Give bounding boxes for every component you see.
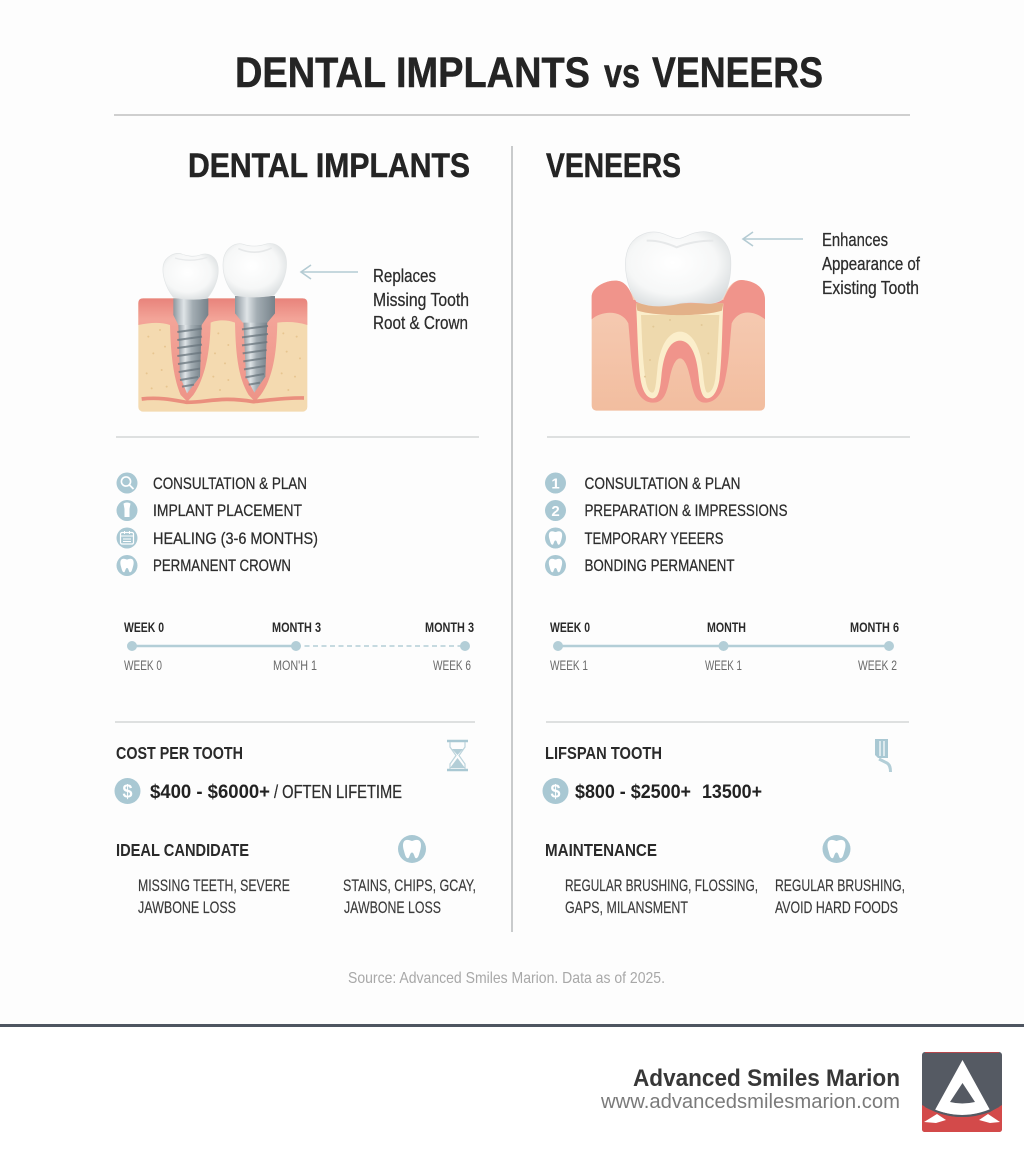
- timeline: MONTH 3: [425, 620, 474, 635]
- icon: dollar: $: [122, 782, 133, 802]
- icon: tooth: [822, 835, 850, 863]
- source note: Source: Advanced Smiles Marion. Data as of 2025.: [348, 970, 665, 987]
- callout: replaces missing tooth root and crown: [373, 266, 469, 333]
- footer: [0, 1024, 1024, 1154]
- timeline: WEEK 0: [550, 620, 590, 635]
- lifespan block: [542, 739, 890, 804]
- timeline: WEEK 1: [705, 658, 742, 673]
- icon: tooth: [116, 555, 138, 576]
- timeline: WEEK 0: [124, 658, 162, 673]
- logo: [922, 1052, 1002, 1132]
- maintenance text: veneers: AVOID HARD FOODS: [775, 899, 898, 917]
- heading: veneers: VENEERS: [546, 147, 681, 185]
- step text: CONSULTATION & PLAN: [584, 475, 740, 493]
- heading: COST PER TOOTH: [116, 743, 243, 763]
- icon: tooth: [398, 835, 426, 863]
- heading: LIFSPAN TOOTH: [545, 743, 662, 763]
- icon: number 2: [545, 500, 566, 521]
- callout: replaces missing tooth root and crown: Root & Crown: [373, 313, 468, 333]
- candidate text: veneers: STAINS, CHIPS, GCAY,: [343, 877, 476, 895]
- candidate text: implants: JAWBONE LOSS: [138, 899, 236, 917]
- callout: enhances appearance: Existing Tooth: [822, 278, 919, 298]
- step text: TEMPORARY YEEERS: [584, 530, 724, 548]
- maintenance text: implants: [565, 877, 758, 917]
- title: vs: [604, 50, 640, 96]
- icon: tooth: [545, 555, 566, 576]
- timeline: WEEK 0: [124, 620, 164, 635]
- icon: hourglass: [447, 741, 468, 770]
- timeline: MON'H 1: [273, 658, 317, 673]
- icon: calendar: [116, 528, 138, 548]
- timeline: WEEK 6: [433, 658, 471, 673]
- timeline: [550, 620, 899, 673]
- cost range: $800 - $2500+: [575, 782, 691, 803]
- lifespan value: 13500+: [702, 782, 762, 803]
- icon: number 1: 1: [551, 476, 560, 492]
- candidate text: implants: MISSING TEETH, SEVERE: [138, 877, 290, 895]
- icon: number 1: [545, 472, 566, 494]
- arrow: to veneer: [743, 232, 803, 246]
- icon: implant post: [116, 500, 138, 521]
- timeline: MONTH 6: [850, 620, 899, 635]
- icon: dollar: [114, 778, 140, 804]
- heading: IDEAL CANDIDATE: [116, 840, 249, 860]
- timeline: WEEK 1: [550, 658, 588, 673]
- step text: PERMANENT CROWN: [153, 557, 291, 575]
- icon: dollar: $: [550, 782, 561, 802]
- icon: tooth: [545, 528, 566, 548]
- heading: MAINTENANCE: [545, 840, 657, 860]
- ideal candidate block: [116, 835, 476, 917]
- maintenance text: veneers: REGULAR BRUSHING,: [775, 877, 905, 895]
- maintenance block: [545, 835, 905, 917]
- timeline: WEEK 2: [858, 658, 897, 673]
- heading: dental implants: DENTAL IMPLANTS: [188, 147, 470, 185]
- website: www.advancedsmilesmarion.com: [600, 1091, 900, 1113]
- maintenance text: veneers: [775, 877, 905, 917]
- step text: HEALING (3-6 MONTHS): [153, 530, 318, 548]
- title: VENEERS: [652, 50, 823, 97]
- callout: enhances appearance: Enhances: [822, 230, 888, 250]
- illustration: two dental implants in jawbone: [138, 244, 307, 412]
- title: DENTAL IMPLANTS: [235, 50, 590, 97]
- panel: veneers: [542, 147, 921, 917]
- candidate text: implants: [138, 877, 290, 917]
- cost range: $400 - $6000+: [150, 782, 270, 803]
- icon: number 2: 2: [551, 503, 560, 520]
- step text: PREPARATION & IMPRESSIONS: [584, 502, 788, 520]
- timeline: MONTH 3: [272, 620, 321, 635]
- step text: CONSULTATION & PLAN: [153, 475, 307, 493]
- callout: enhances appearance: [822, 230, 921, 298]
- icon: magnifier: [116, 472, 138, 494]
- candidate text: veneers: [343, 877, 476, 917]
- icon: dollar: [542, 778, 568, 804]
- timeline: [124, 620, 474, 673]
- callout: replaces missing tooth root and crown: Missing Tooth: [373, 290, 469, 310]
- callout: replaces missing tooth root and crown: Replaces: [373, 266, 436, 286]
- step text: BONDING PERMANENT: [584, 557, 734, 575]
- arrow: to implant crown: [301, 265, 358, 279]
- icon: toothbrush: [875, 739, 890, 772]
- panel: dental implants: [114, 147, 479, 917]
- illustration: veneer on tooth: [592, 232, 765, 411]
- cost block: [114, 741, 468, 804]
- process steps: [545, 472, 788, 576]
- maintenance text: implants: GAPS, MILANSMENT: [565, 899, 688, 917]
- lifespan note: / OFTEN LIFETIME: [274, 781, 402, 802]
- title: [235, 50, 823, 97]
- callout: enhances appearance: Appearance of: [822, 254, 921, 274]
- process steps: [116, 472, 318, 576]
- brand name: Advanced Smiles Marion: [633, 1065, 900, 1092]
- step text: IMPLANT PLACEMENT: [153, 502, 302, 520]
- maintenance text: implants: REGULAR BRUSHING, FLOSSING,: [565, 877, 758, 895]
- candidate text: veneers: JAWBONE LOSS: [344, 899, 441, 917]
- timeline: MONTH: [707, 620, 746, 635]
